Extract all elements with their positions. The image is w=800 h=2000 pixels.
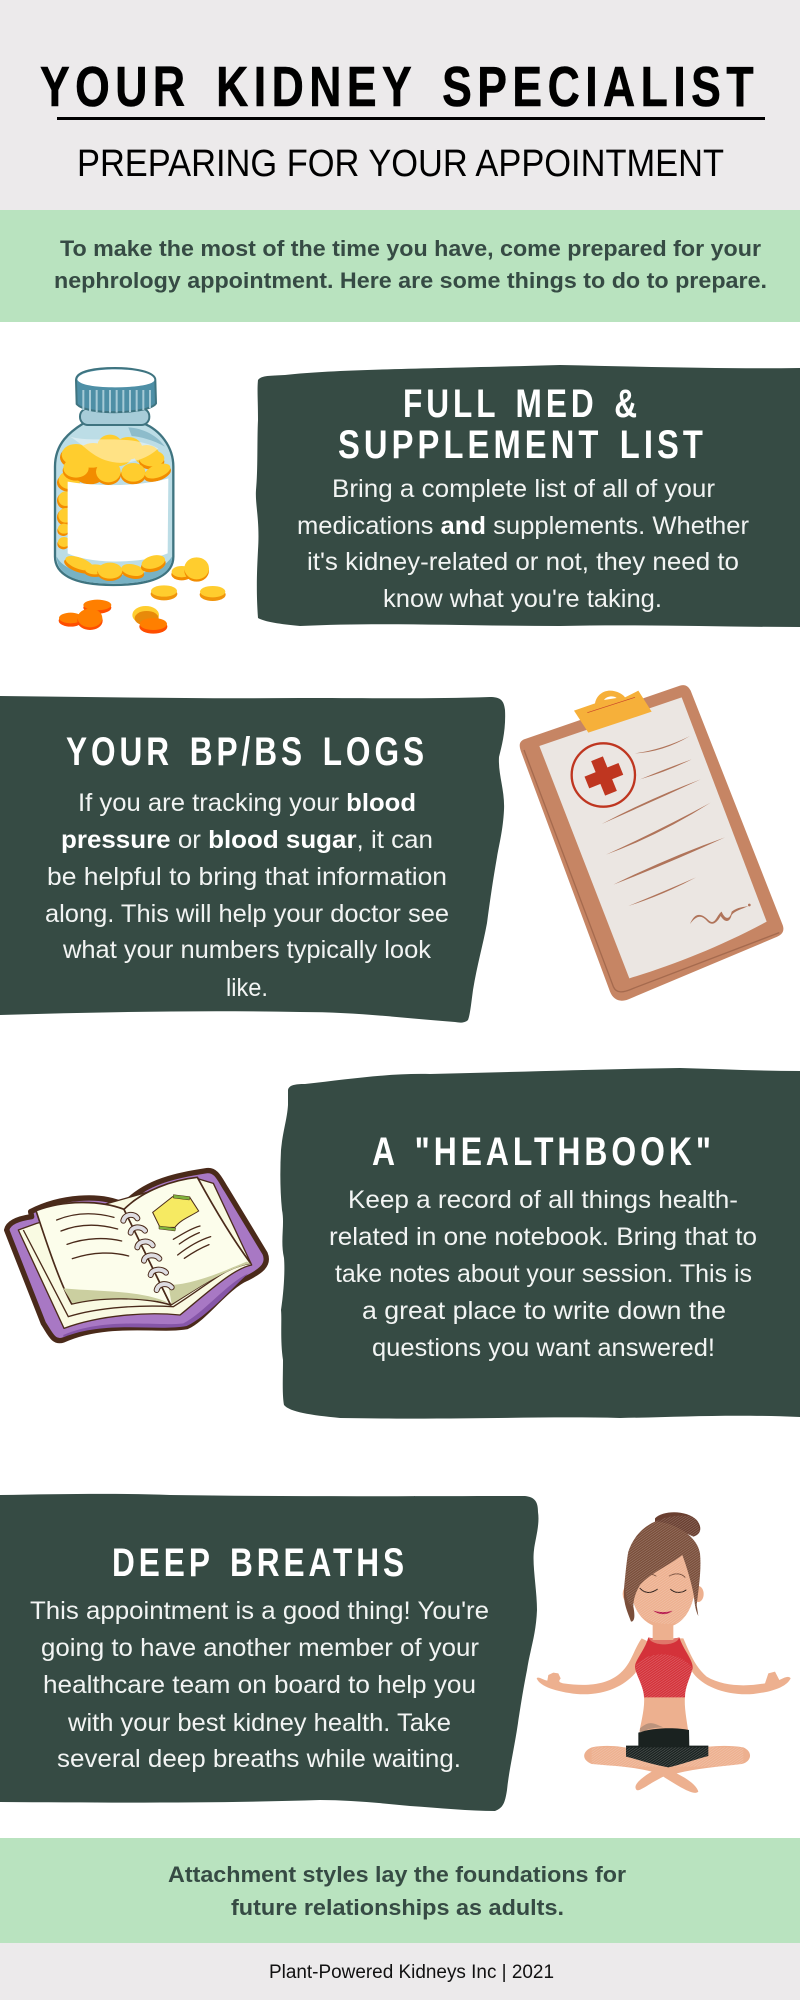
icon: pill bottle [55,368,226,634]
face [640,1574,686,1592]
body text [329,1186,757,1362]
body text: be helpful to bring that information [47,863,447,891]
handwriting lines [602,736,751,924]
shorts [638,1728,689,1747]
callout text: future relationships as adults. [231,1895,564,1920]
panel: full med & supplement list [256,365,800,627]
heading: FULL MED & [403,382,641,426]
icon: meditating woman [537,1512,791,1793]
heading: DEEP BREATHS [112,1541,408,1585]
body text: related in one notebook. Bring that to [329,1223,757,1251]
body text: Bring a complete list of all of your [332,475,715,503]
medical cross badge [572,743,635,807]
panel: your BP/BS logs [0,696,505,1023]
body text: it's kidney-related or not, they need to [307,548,739,576]
heading: A "HEALTHBOOK" [372,1130,715,1174]
body text: along. This will help your doctor see [45,900,449,928]
body text: what your numbers typically look [62,936,431,964]
title underline [57,117,765,120]
neck [653,1623,673,1640]
body text: several deep breaths while waiting. [57,1745,461,1773]
spiral binding [123,1215,172,1290]
body text [30,1597,489,1773]
heading: SUPPLEMENT LIST [338,423,707,467]
clip [574,691,652,733]
legs [584,1746,750,1793]
footer credit band [0,1943,800,2000]
body text: If you are tracking your blood [78,789,416,817]
panel: a healthbook [280,1068,800,1419]
body text: healthcare team on board to help you [43,1671,476,1699]
hair [624,1512,700,1622]
intro text: nephrology appointment. Here are some things to do to prepare. [54,268,767,293]
body text: know what you're taking. [383,585,662,613]
body text: a great place to write down the [362,1297,726,1325]
intro band [0,210,800,322]
red top [635,1637,693,1697]
heading: YOUR BP/BS LOGS [66,730,428,774]
credit text: Plant-Powered Kidneys Inc | 2021 [269,1962,554,1983]
body text: questions you want answered! [372,1334,715,1362]
body text [297,475,749,613]
header band [0,0,800,210]
body text: medications and supplements. Whether [297,512,749,540]
panel: deep breaths [0,1494,538,1811]
body text: like. [226,974,268,1002]
bookmark note [153,1195,199,1231]
loose pills [59,557,226,634]
footer callout band [0,1838,800,1943]
torso [639,1697,688,1732]
heading [338,382,707,467]
body text: pressure or blood sugar, it can [61,826,433,854]
pills inside bottle [57,435,173,549]
callout text [168,1862,626,1920]
intro text [54,236,767,293]
arms [537,1638,791,1694]
icon: clipboard [520,685,783,1001]
subtitle: PREPARING FOR YOUR APPOINTMENT [77,142,724,184]
body text: going to have another member of your [41,1634,479,1662]
body text: take notes about your session. This is [335,1260,752,1288]
hatching overlay [592,1516,743,1767]
intro text: To make the most of the time you have, come prepared for your [60,236,761,261]
body text: with your best kidney health. Take [67,1709,451,1737]
body text: Keep a record of all things health- [348,1186,738,1214]
icon: open notebook [7,1171,266,1341]
bottle label [68,478,168,561]
page lines [57,1214,211,1259]
ears and head [623,1586,632,1602]
body text: This appointment is a good thing! You're [30,1597,489,1625]
callout text: Attachment styles lay the foundations for [168,1862,626,1887]
body text [45,789,449,1002]
